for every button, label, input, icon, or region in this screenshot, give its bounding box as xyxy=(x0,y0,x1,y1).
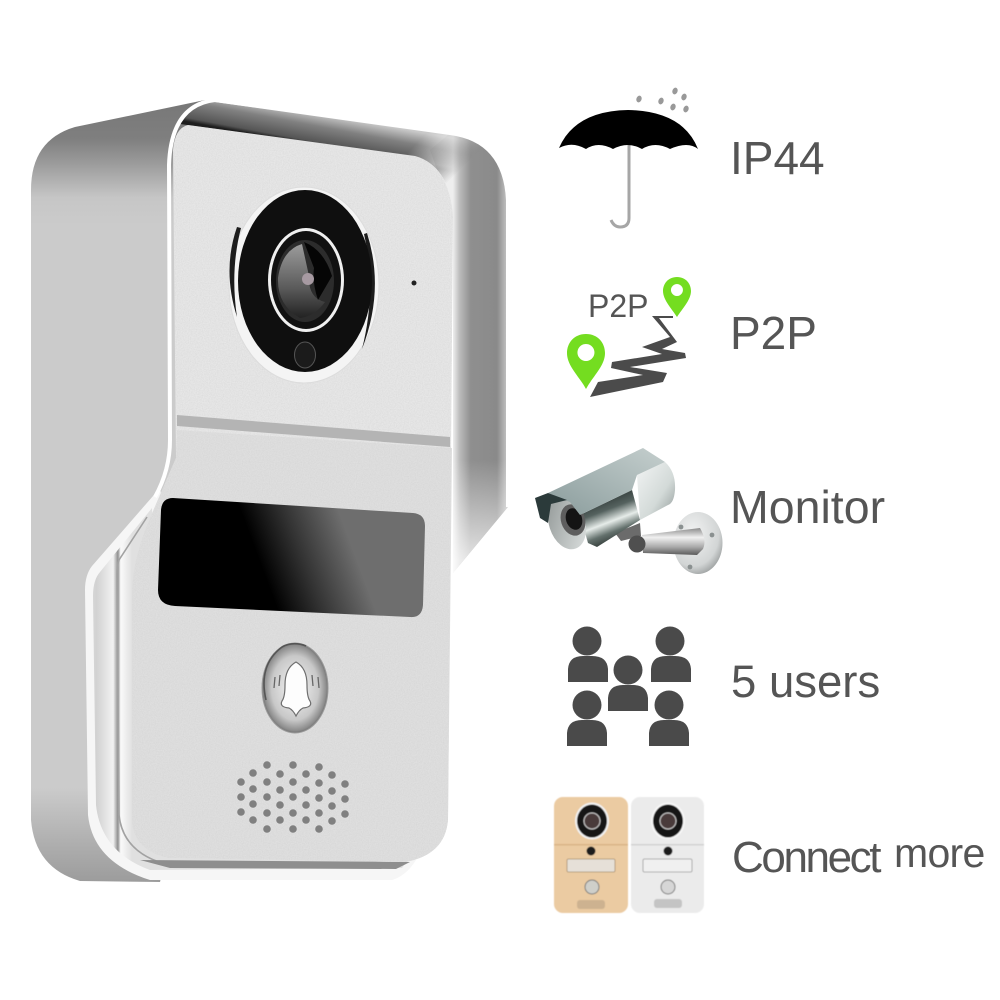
gold sensor xyxy=(586,846,596,856)
gold divider xyxy=(554,844,628,846)
user top right xyxy=(651,626,691,682)
gold button xyxy=(585,880,599,894)
label: more: more xyxy=(894,830,985,876)
user bottom right xyxy=(649,690,689,746)
IR display window xyxy=(158,498,425,617)
doorbell button xyxy=(262,643,328,733)
zigzag path xyxy=(590,316,686,397)
lower inner rim band xyxy=(93,508,415,870)
gold camera bezel xyxy=(577,804,607,838)
gold body xyxy=(554,797,628,913)
face plate xyxy=(132,125,453,862)
green pin large xyxy=(567,334,605,389)
feature: P2P xyxy=(567,277,817,397)
label: Monitor: Monitor xyxy=(730,481,885,533)
lower face shade xyxy=(132,430,452,862)
rim chrome line xyxy=(117,517,400,866)
lens glass xyxy=(271,231,341,329)
green pin small xyxy=(663,277,691,317)
label: Connect: Connect xyxy=(732,833,881,882)
umbrella canopy xyxy=(559,110,698,149)
lens ring xyxy=(268,228,344,332)
doorbell product photo xyxy=(31,100,508,882)
camera light sensor xyxy=(294,342,316,368)
doorbell back housing xyxy=(31,100,205,882)
wall mount plate xyxy=(674,512,722,574)
lens interior xyxy=(276,240,334,322)
microphone hole xyxy=(412,280,416,286)
label: P2P: P2P xyxy=(730,307,817,359)
icon: five users xyxy=(567,626,691,746)
silver sensor xyxy=(664,846,672,856)
face grain xyxy=(132,125,453,862)
lens highlight xyxy=(278,244,325,318)
silver button xyxy=(661,880,675,894)
camera left glint xyxy=(230,227,241,317)
user centre xyxy=(608,656,648,711)
silver window xyxy=(643,859,692,872)
hood bottom fade xyxy=(453,460,508,573)
silver body xyxy=(631,797,704,913)
bell icon xyxy=(281,662,311,716)
silver camera ring xyxy=(651,802,685,840)
icon: P2P route xyxy=(567,277,691,397)
shield dark lip xyxy=(535,493,567,523)
icon: umbrella xyxy=(559,87,698,227)
hood white edge xyxy=(155,100,508,507)
silver camera bezel xyxy=(653,804,683,838)
camera sunshield xyxy=(548,448,665,515)
camera mid band xyxy=(580,490,640,547)
silver camera lens xyxy=(660,813,676,829)
mount screws xyxy=(679,525,714,569)
feature: Monitor xyxy=(535,448,885,574)
gold camera ring xyxy=(575,802,609,840)
camera lens glass xyxy=(563,506,585,532)
umbrella handle xyxy=(611,145,629,227)
face divider stripe xyxy=(177,415,450,447)
feature: Connect more xyxy=(554,797,985,913)
icon: gold doorbell xyxy=(554,797,628,913)
camera module xyxy=(229,187,379,383)
feature: 5 users xyxy=(567,626,880,746)
feature: IP44 xyxy=(559,87,825,227)
camera lens barrel xyxy=(542,492,592,554)
camera arm xyxy=(642,528,704,555)
silver divider xyxy=(631,844,704,846)
label: 5 users: 5 users xyxy=(731,656,880,707)
camera chrome ring xyxy=(229,187,379,383)
doorbell hood right wall xyxy=(430,133,508,573)
label: IP44: IP44 xyxy=(730,132,825,184)
gold speaker xyxy=(577,900,605,909)
gold window xyxy=(567,859,615,872)
camera lens rim xyxy=(557,501,589,539)
camera right glint xyxy=(362,233,375,349)
camera black bezel xyxy=(238,190,372,372)
silver speaker xyxy=(654,899,682,908)
rim bottom shadow xyxy=(140,860,410,869)
rain drops xyxy=(635,87,690,113)
user top left xyxy=(568,626,608,682)
button casing xyxy=(262,643,328,733)
hood top wall xyxy=(180,102,476,182)
arm knuckle xyxy=(628,536,646,552)
icon text: P2P: P2P xyxy=(588,288,648,324)
icon: security camera xyxy=(535,448,722,574)
speaker grille xyxy=(237,761,349,833)
lower outer rim xyxy=(85,488,416,880)
user bottom left xyxy=(567,690,607,746)
gold camera lens xyxy=(584,813,600,829)
lens dark wedge xyxy=(304,242,332,300)
camera rear barrel xyxy=(637,462,675,520)
button dark edge xyxy=(264,644,306,700)
icon: silver doorbell xyxy=(631,797,704,913)
arm joint xyxy=(615,523,641,541)
lens centre xyxy=(302,273,314,285)
bell sound marks xyxy=(274,675,319,688)
